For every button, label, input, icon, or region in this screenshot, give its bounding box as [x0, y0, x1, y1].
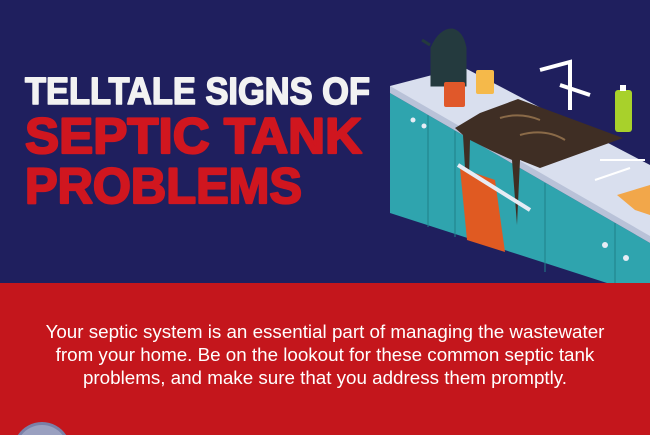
- mugs: [444, 82, 465, 107]
- title: [24, 71, 370, 214]
- faucet: [540, 62, 590, 110]
- title: SEPTIC TANK: [25, 108, 362, 164]
- cutting board: [617, 185, 650, 215]
- coffee pot: [422, 30, 465, 85]
- illustration: kitchen sink overflow: [390, 28, 650, 283]
- towel: [460, 168, 505, 252]
- title: TELLTALE SIGNS OF: [25, 71, 370, 113]
- cutlery: [600, 159, 645, 161]
- cabinet front: [390, 93, 650, 283]
- title: PROBLEMS: [25, 158, 302, 214]
- soap: [615, 90, 632, 132]
- intro text: Your septic system is an essential part of managing the wastewater from your home. Be on the lookout for these common septic tank problems, and make sure that you address them promptly.: [46, 321, 604, 388]
- intro panel: [0, 283, 650, 435]
- countertop: [390, 67, 650, 238]
- icon: circle badge: [18, 422, 66, 435]
- header panel: [0, 0, 650, 283]
- sludge: [455, 99, 623, 225]
